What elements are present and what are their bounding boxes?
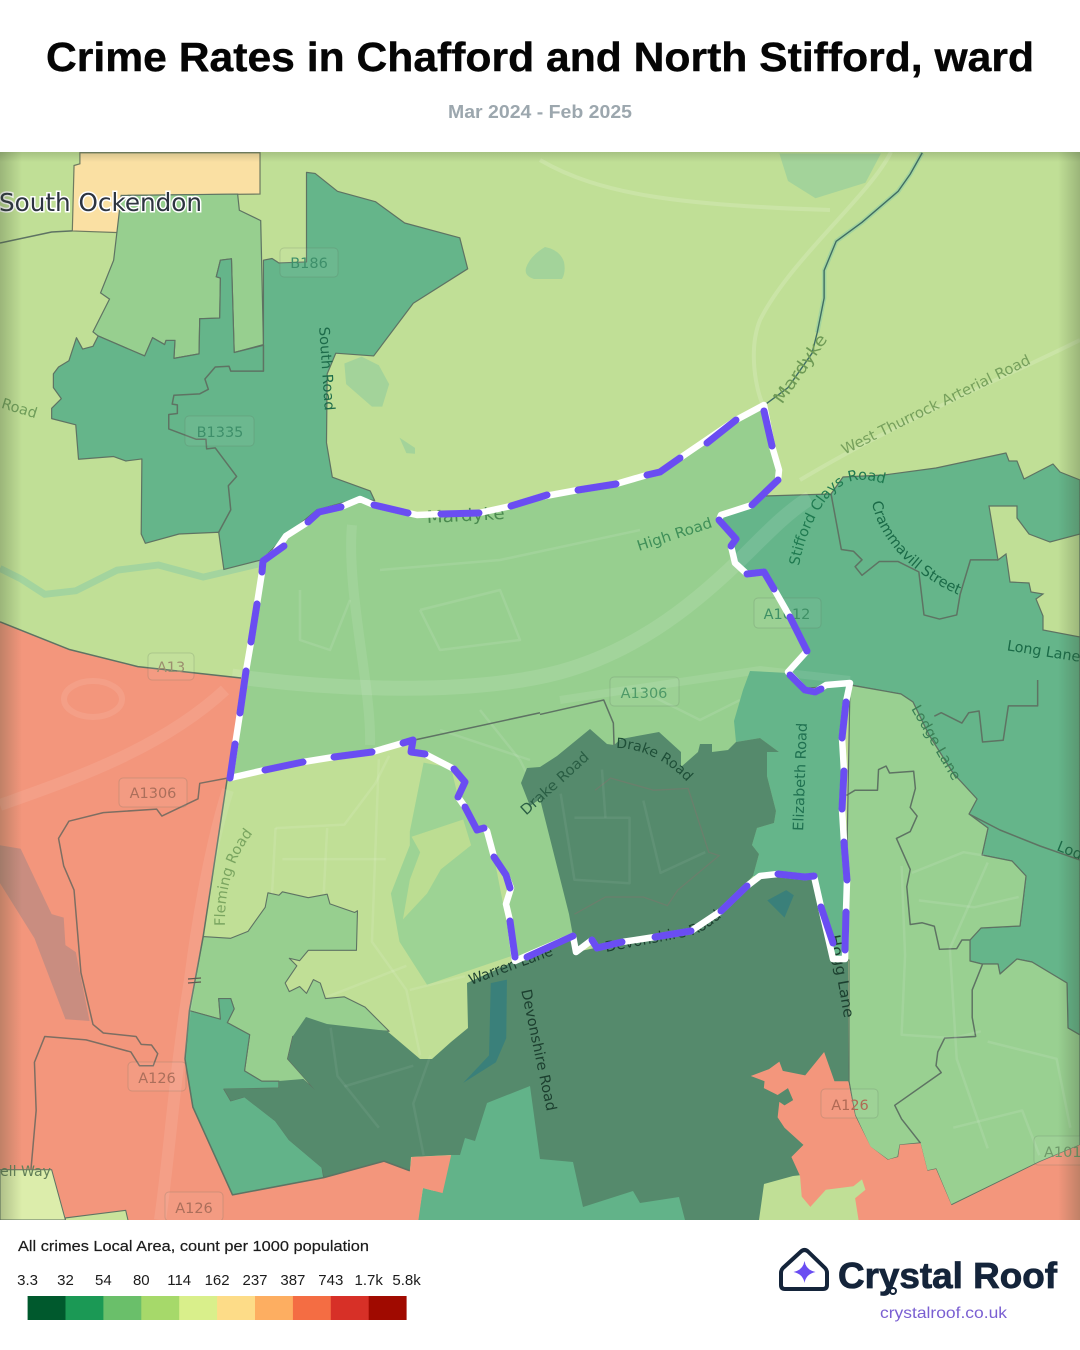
area: south teal ward patch bbox=[418, 1086, 685, 1220]
park: lime patch bbox=[403, 819, 471, 919]
shield: B1335 bbox=[185, 416, 254, 446]
area: south-west teal ward bbox=[185, 999, 324, 1195]
shield: A1012 far east bbox=[1034, 1136, 1080, 1165]
label: West Thurrock Arterial Road: West Thurrock Arterial Road bbox=[839, 353, 1033, 458]
shield: A1012: A1012 bbox=[764, 607, 810, 623]
legend colour scale bbox=[28, 1296, 407, 1320]
legend value labels: 1.7k bbox=[355, 1272, 383, 1289]
label: High Road: High Road bbox=[635, 516, 714, 555]
legend title: All crimes Local Area, count per 1000 population bbox=[18, 1238, 369, 1255]
park: green area beside Warren bbox=[391, 763, 513, 985]
label: Crammavill Street: Crammavill Street bbox=[872, 501, 961, 594]
shield: A13: A13 bbox=[157, 660, 185, 676]
ward boundary route: purple dashes bbox=[230, 411, 847, 957]
label: Devonshire Road south: Devonshire Road bbox=[517, 988, 559, 1112]
boundary: salmon internal road line bbox=[31, 778, 227, 1169]
area: south-west mid-green ward bbox=[189, 892, 389, 1090]
shield: A13 bbox=[148, 653, 194, 680]
ward streets bbox=[299, 529, 740, 800]
rail symbol on west boundary bbox=[188, 978, 201, 983]
label: Devonshire Road east: Devonshire Road bbox=[606, 909, 721, 952]
label: South Road: South Road bbox=[315, 326, 337, 411]
boundary: east mid-green ward inner lines bbox=[847, 766, 983, 1143]
area: southern dark ward bbox=[224, 874, 849, 1220]
boundary: east teal ward inner lines bbox=[831, 494, 1080, 860]
shield: A126 south-east: A126 bbox=[831, 1098, 869, 1114]
area: south-east salmon ward bbox=[751, 1052, 1080, 1220]
road labels bbox=[0, 328, 1080, 1179]
legend bbox=[17, 1238, 421, 1320]
race track and road features in salmon area bbox=[0, 681, 228, 1220]
area: top-left yellow ward bbox=[72, 153, 260, 233]
river: Mardyke north stream bbox=[764, 153, 922, 406]
area: east mid-green ward bbox=[845, 685, 1080, 1205]
area: NW mid-green ward bbox=[93, 194, 263, 358]
water: dark ward lakes bbox=[463, 890, 794, 1083]
streets: lime residential estate bbox=[272, 756, 465, 1055]
legend value labels: 80 bbox=[133, 1272, 150, 1289]
shield: A126 south-east bbox=[821, 1089, 878, 1118]
label: Mardyke north: Mardyke bbox=[770, 331, 832, 408]
shield: B1335: B1335 bbox=[197, 425, 243, 441]
area: west high-crime salmon top bbox=[0, 622, 248, 690]
streets: east mid-green ward bbox=[902, 852, 1070, 1155]
shield: A126 south bbox=[165, 1192, 223, 1221]
area: Chafford and North Stifford ward fill bbox=[230, 405, 850, 961]
label: Elizabeth Road: Elizabeth Road bbox=[791, 723, 811, 831]
shield: A126 south: A126 bbox=[175, 1201, 213, 1217]
area: NW teal ward bbox=[52, 172, 468, 569]
area: Drake Road dark ward bbox=[521, 729, 779, 952]
road bands in north farmland bbox=[540, 152, 1080, 480]
label: Drake Road right: Drake Road bbox=[617, 738, 694, 781]
shield: A1012 bbox=[754, 598, 821, 628]
map edge vignette bbox=[0, 152, 1080, 1220]
shield: B186: B186 bbox=[290, 256, 328, 272]
label: Long Lane: Long Lane bbox=[1006, 638, 1080, 666]
label: Road west: Road bbox=[0, 396, 39, 422]
logo wordmark: Crystal Roof bbox=[838, 1255, 1058, 1296]
map base: low crime lime area bbox=[0, 152, 1080, 1220]
legend value labels: 114 bbox=[167, 1272, 191, 1289]
legend value labels: 54 bbox=[95, 1272, 112, 1289]
streets: southern dark ward west bbox=[331, 1028, 430, 1155]
shield: B186 bbox=[280, 248, 338, 277]
legend value labels: 5.8k bbox=[392, 1272, 421, 1289]
river: Mardyke water channel west bbox=[0, 563, 262, 594]
title: Crime Rates in Chafford and North Stifford, ward bbox=[46, 34, 1034, 80]
shield: A1306 west bbox=[119, 778, 187, 807]
road shields bbox=[119, 248, 1080, 1221]
label: Lodge Lane: Lodge Lane bbox=[908, 703, 963, 783]
legend value labels: 3.3 bbox=[17, 1272, 38, 1289]
legend value labels: 237 bbox=[242, 1272, 268, 1289]
label: Fleming Road: Fleming Road bbox=[214, 828, 252, 925]
logo: Crystal Roof bbox=[781, 1250, 1058, 1322]
place label: South Ockendon: South Ockendon bbox=[0, 188, 202, 217]
area: Elizabeth Road teal ward bbox=[734, 671, 850, 959]
label: Stifford Clays Road: Stifford Clays Road bbox=[789, 470, 886, 565]
boundary: inner line of dark ward bbox=[574, 778, 719, 914]
shield: A1306 west: A1306 bbox=[130, 786, 176, 802]
legend value labels: 32 bbox=[57, 1272, 74, 1289]
road band: A13 and High Road through the ward bbox=[232, 498, 810, 688]
ward boundary route: white base bbox=[230, 405, 850, 961]
shield: A126 west: A126 bbox=[138, 1071, 176, 1087]
area: lime gap in east ward bbox=[989, 506, 1080, 637]
river: Mardyke north stream fringe bbox=[817, 153, 922, 333]
shield: A1306 east bbox=[610, 677, 679, 706]
boundary: ward inner line bbox=[413, 713, 540, 740]
website link text: crystalroof.co.uk bbox=[880, 1305, 1008, 1322]
label: Mardyke west: Mardyke bbox=[426, 504, 505, 528]
area: east teal ward bbox=[700, 453, 1080, 1035]
legend value labels: 387 bbox=[280, 1272, 305, 1289]
streets: dark ward bbox=[560, 770, 706, 884]
logo y-tail ring bbox=[890, 1288, 896, 1294]
dark lake in salmon area bbox=[0, 845, 90, 1021]
shield: A1306 east: A1306 bbox=[621, 686, 667, 702]
road band: A1306 bbox=[560, 670, 850, 700]
label: Drake Road left: Drake Road bbox=[518, 749, 593, 819]
shield: A126 west bbox=[128, 1062, 186, 1091]
area: pale ward bottom-left bbox=[0, 1170, 65, 1220]
boundary: west salmon edge bbox=[185, 778, 410, 1195]
label: Hogg Lane: Hogg Lane bbox=[826, 934, 856, 1019]
label: Warren Lane: Warren Lane bbox=[467, 944, 555, 989]
legend value labels: 743 bbox=[318, 1272, 343, 1289]
legend value labels bbox=[17, 1272, 421, 1289]
area: west high-crime salmon bbox=[0, 680, 451, 1220]
boundary: line west of yellow ward bbox=[0, 231, 72, 243]
area: pale ward bottom strip bbox=[65, 1210, 128, 1221]
boundary: ward inner line continued bbox=[540, 700, 614, 745]
boundary: NW ward inner line bbox=[169, 345, 263, 532]
boundary: salmon top edge bbox=[0, 622, 241, 678]
label: ell Way: ell Way bbox=[0, 1164, 51, 1180]
subtitle: date range: Mar 2024 - Feb 2025 bbox=[448, 102, 632, 122]
water: top lake and ponds bbox=[344, 153, 881, 454]
choropleth map panel bbox=[0, 152, 1080, 1220]
icon: purple sparkle bbox=[794, 1261, 816, 1283]
icon: house outline bbox=[781, 1250, 827, 1289]
legend value labels: 162 bbox=[205, 1272, 230, 1289]
road band: north-south link bbox=[351, 525, 370, 745]
